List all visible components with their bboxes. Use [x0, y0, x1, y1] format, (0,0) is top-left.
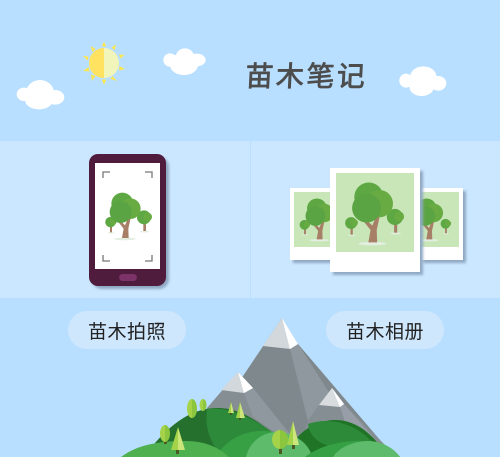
button: photo: [68, 311, 186, 349]
icon: phone: [89, 154, 169, 289]
panel: photo section: [0, 141, 250, 298]
panel: album section: [251, 141, 500, 298]
button: album: 苗木相册: [346, 321, 424, 343]
hills: [121, 408, 400, 457]
button: photo: 苗木拍照: [88, 321, 166, 343]
button: album: [326, 311, 444, 349]
icon: photo right: [415, 188, 466, 263]
main mountain: [200, 318, 380, 440]
icon: cloud middle: [163, 48, 206, 75]
icon: photo left: [290, 188, 333, 263]
mountains: [200, 318, 385, 445]
right mountain: [300, 388, 385, 445]
trees on hills: [160, 399, 299, 454]
icon: cloud right: [399, 66, 446, 96]
title: 苗木笔记: [245, 61, 368, 92]
icon: cloud left: [17, 80, 64, 109]
icon: sun: [83, 42, 125, 85]
left mountain: [200, 372, 300, 440]
icon: photo center: [330, 168, 423, 275]
